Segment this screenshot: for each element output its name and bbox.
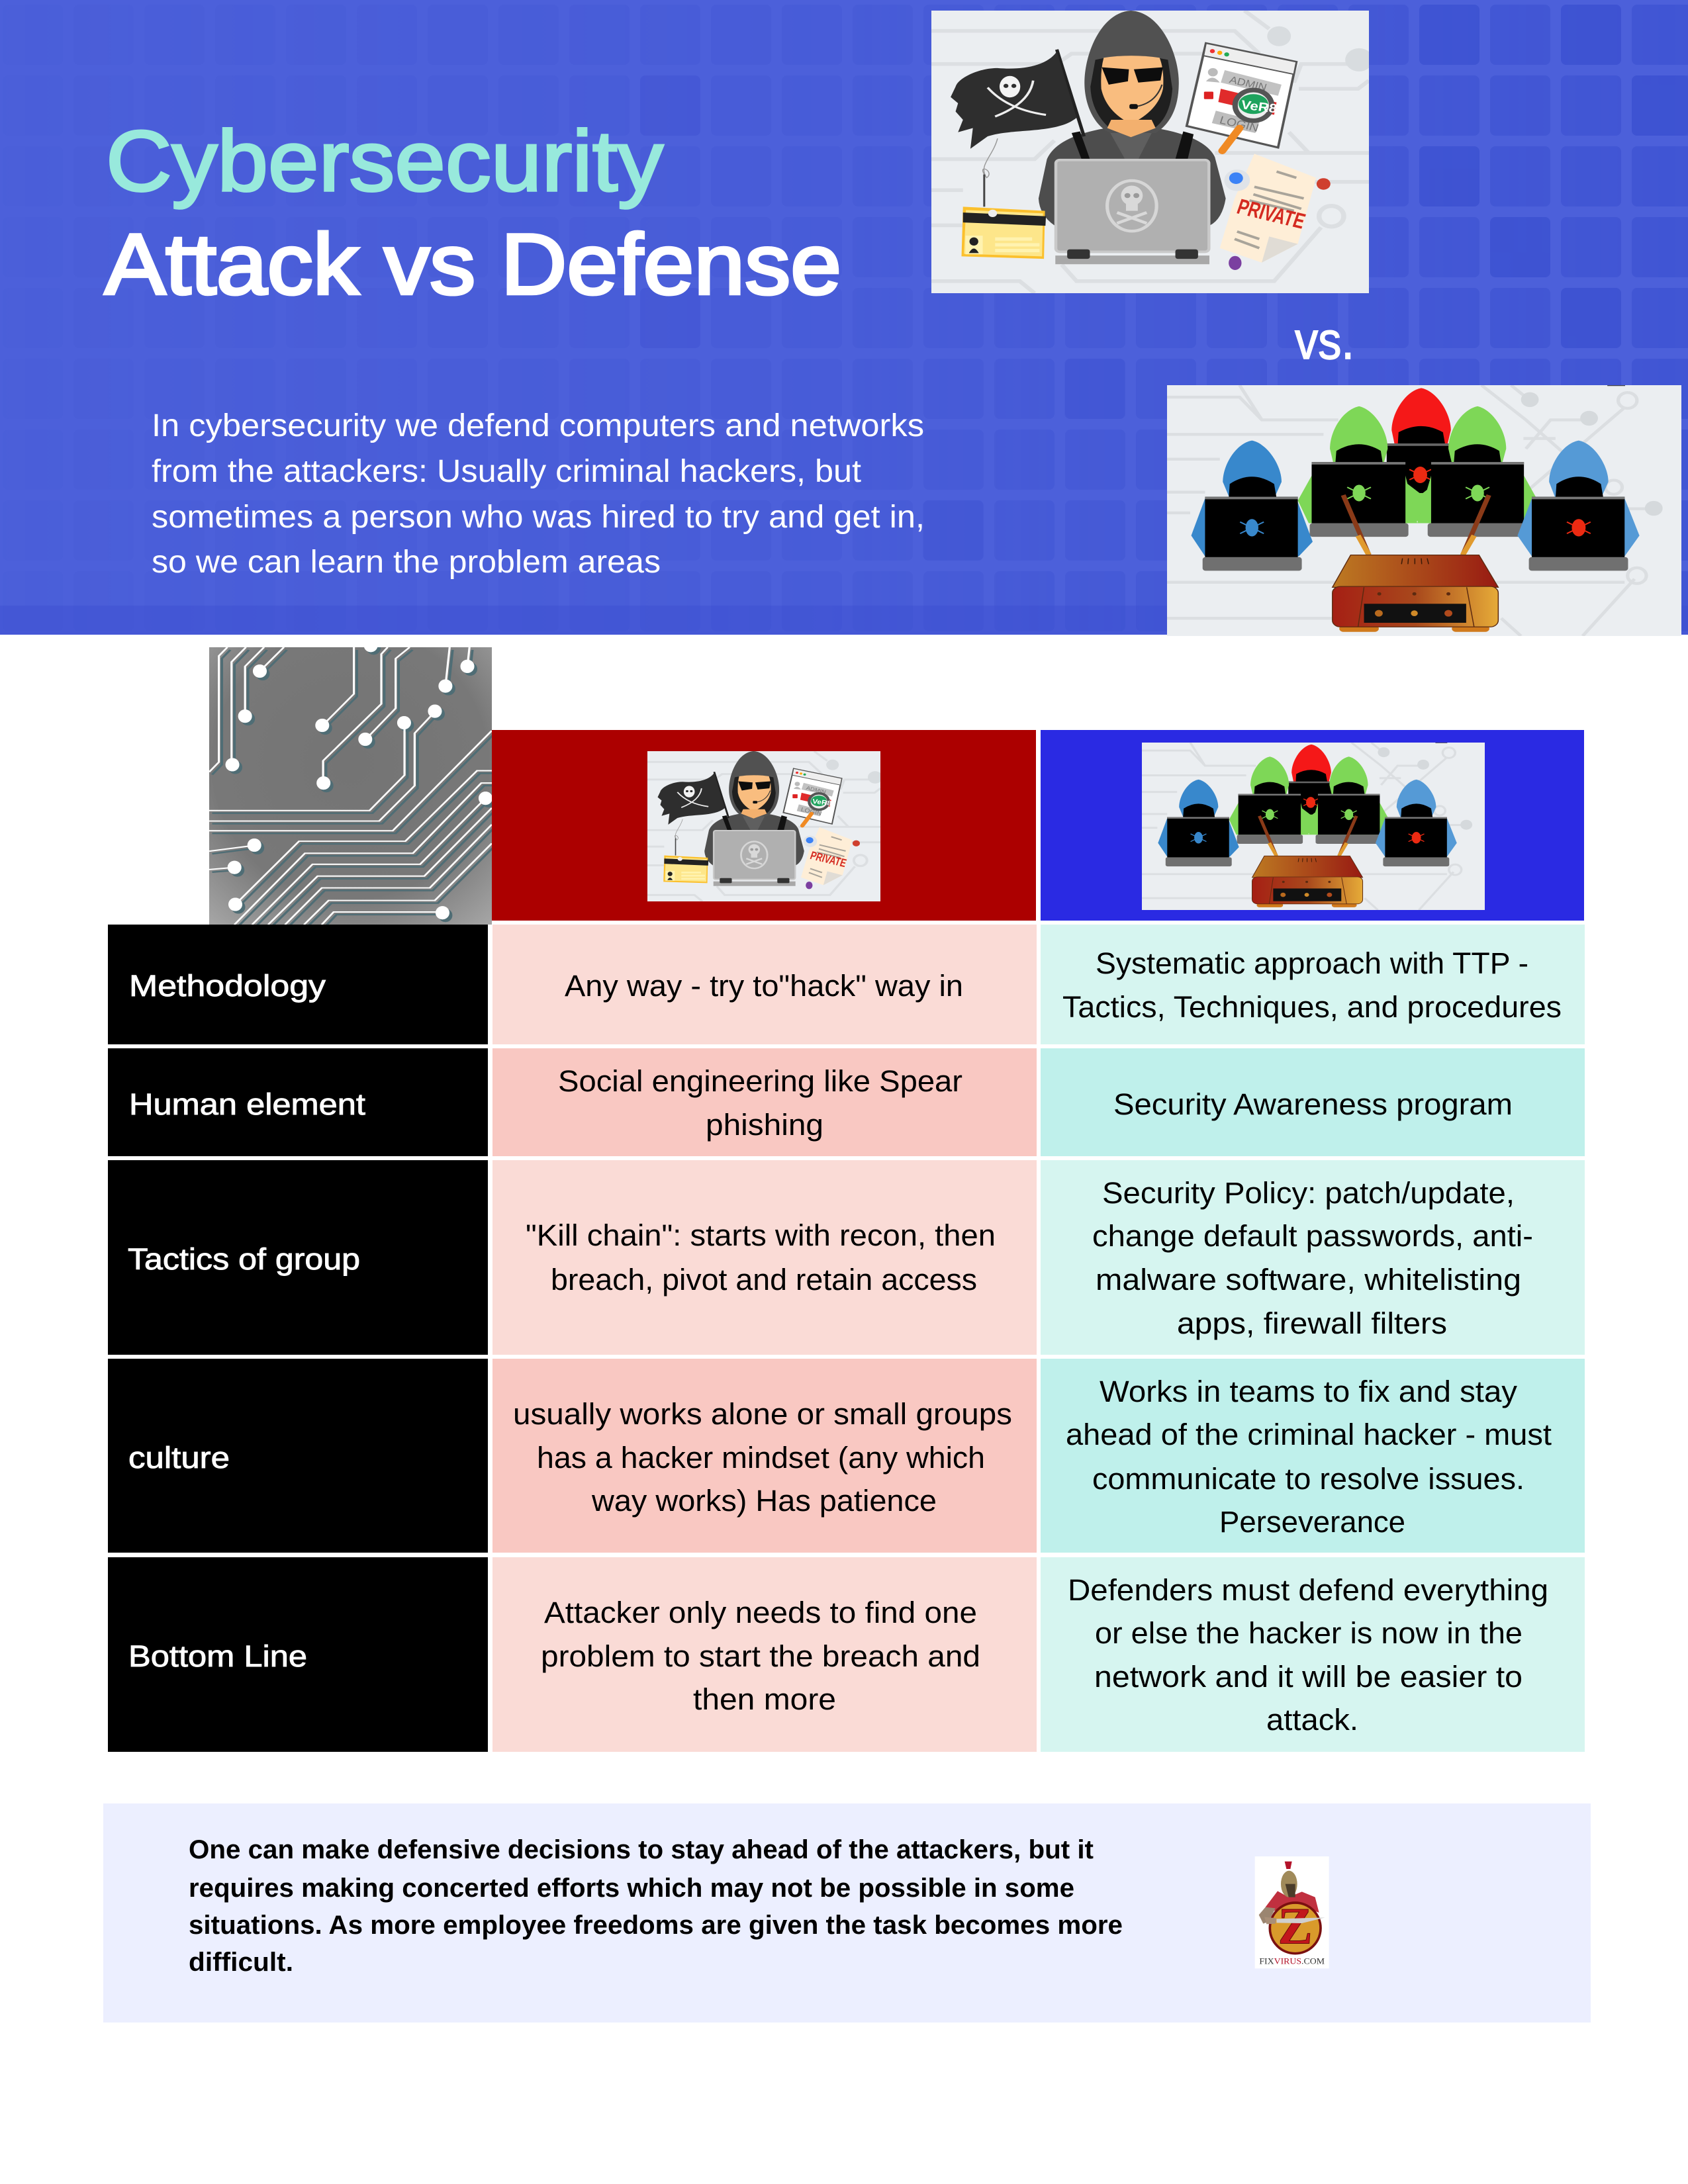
- attack cell: usually works alone or small groups: [513, 1397, 1012, 1431]
- defense cell: Perseverance: [1219, 1505, 1405, 1539]
- defense cell: malware software, whitelisting: [1096, 1263, 1521, 1297]
- defense cell: [1068, 1573, 1548, 1737]
- attack cell: [526, 1218, 996, 1297]
- icon: FixVirus warrior logo: Z: [1278, 1897, 1313, 1955]
- panel: conclusion: [103, 1803, 1591, 2023]
- image: hacker at laptop: [931, 11, 1373, 293]
- defense cell: network and it will be easier to: [1094, 1660, 1523, 1694]
- intro paragraph: In cybersecurity we defend computers and networks: [152, 408, 924, 443]
- attack cell: way works) Has patience: [591, 1484, 937, 1518]
- defense cell: Defenders must defend everything: [1068, 1573, 1548, 1607]
- defense cell: Security Awareness program: [1113, 1087, 1513, 1121]
- intro paragraph: sometimes a person who was hired to try and get in,: [152, 500, 925, 535]
- defense cell: or else the hacker is now in the: [1095, 1616, 1523, 1650]
- row: culture: [108, 1359, 1585, 1553]
- vs label: vs.: [1295, 311, 1354, 370]
- attack cell: Attacker only needs to find one: [544, 1596, 977, 1629]
- conclusion text: situations. As more employee freedoms are given the task becomes more: [189, 1911, 1123, 1940]
- attack cell: [513, 1397, 1012, 1518]
- row: Bottom Line: [108, 1557, 1585, 1752]
- defense cell: Tactics, Techniques, and procedures: [1062, 990, 1562, 1024]
- table header: attacker: [492, 730, 1036, 921]
- image: circuit board: [209, 639, 495, 927]
- row label: Bottom Line: [128, 1639, 307, 1673]
- icon: FixVirus warrior logo: FIXVIRUS.COM: [1259, 1956, 1325, 1966]
- attack cell: problem to start the breach and: [541, 1639, 980, 1673]
- defense cell: [1066, 1375, 1552, 1539]
- defense cell: [1062, 946, 1562, 1024]
- attack cell: Any way - try to"hack" way in: [565, 969, 963, 1003]
- attack cell: phishing: [706, 1108, 823, 1142]
- attack cell: [558, 1064, 962, 1142]
- defender thumbnail: [1142, 741, 1485, 910]
- defense cell: apps, firewall filters: [1177, 1306, 1447, 1340]
- intro paragraph: [152, 408, 925, 580]
- title line: Cybersecurity: Cybersecurity: [106, 113, 663, 209]
- attack cell: breach, pivot and retain access: [551, 1263, 977, 1297]
- attack cell: then more: [693, 1682, 836, 1716]
- defense cell: attack.: [1266, 1703, 1358, 1737]
- table header: defender: [1041, 730, 1584, 921]
- defense cell: communicate to resolve issues.: [1092, 1462, 1524, 1496]
- row: Human element: [108, 1048, 1585, 1156]
- attack cell: has a hacker mindset (any which: [537, 1441, 985, 1475]
- defense cell: Works in teams to fix and stay: [1100, 1375, 1518, 1408]
- title: [105, 113, 841, 312]
- defense cell: Systematic approach with TTP -: [1096, 946, 1528, 980]
- intro paragraph: so we can learn the problem areas: [152, 545, 661, 580]
- row label: Human element: [129, 1087, 366, 1121]
- row label: Tactics of group: [128, 1242, 360, 1276]
- attack cell: Social engineering like Spear: [558, 1064, 962, 1098]
- header banner: [0, 0, 1688, 635]
- row: Tactics of group: [108, 1160, 1585, 1355]
- attack cell: "Kill chain": starts with recon, then: [526, 1218, 996, 1252]
- icon: FixVirus warrior logo: [1255, 1856, 1329, 1968]
- row label: culture: [128, 1441, 230, 1475]
- conclusion text: One can make defensive decisions to stay ahead of the attackers, but it: [189, 1835, 1094, 1864]
- conclusion text: difficult.: [189, 1948, 293, 1977]
- attacker thumbnail: [647, 751, 882, 901]
- defense cell: [1092, 1176, 1533, 1340]
- conclusion text: [189, 1835, 1123, 1977]
- image: defender team around router: [1167, 384, 1681, 636]
- row: Methodology: [108, 925, 1585, 1044]
- row label: Methodology: [129, 969, 326, 1003]
- defense cell: Security Policy: patch/update,: [1102, 1176, 1515, 1210]
- defense cell: change default passwords, anti-: [1092, 1219, 1533, 1253]
- conclusion text: requires making concerted efforts which may not be possible in some: [189, 1874, 1074, 1903]
- intro paragraph: from the attackers: Usually criminal hackers, but: [152, 454, 861, 489]
- defense cell: ahead of the criminal hacker - must: [1066, 1418, 1552, 1451]
- title line: Attack vs Defense: Attack vs Defense: [105, 216, 841, 312]
- attack cell: [541, 1596, 980, 1716]
